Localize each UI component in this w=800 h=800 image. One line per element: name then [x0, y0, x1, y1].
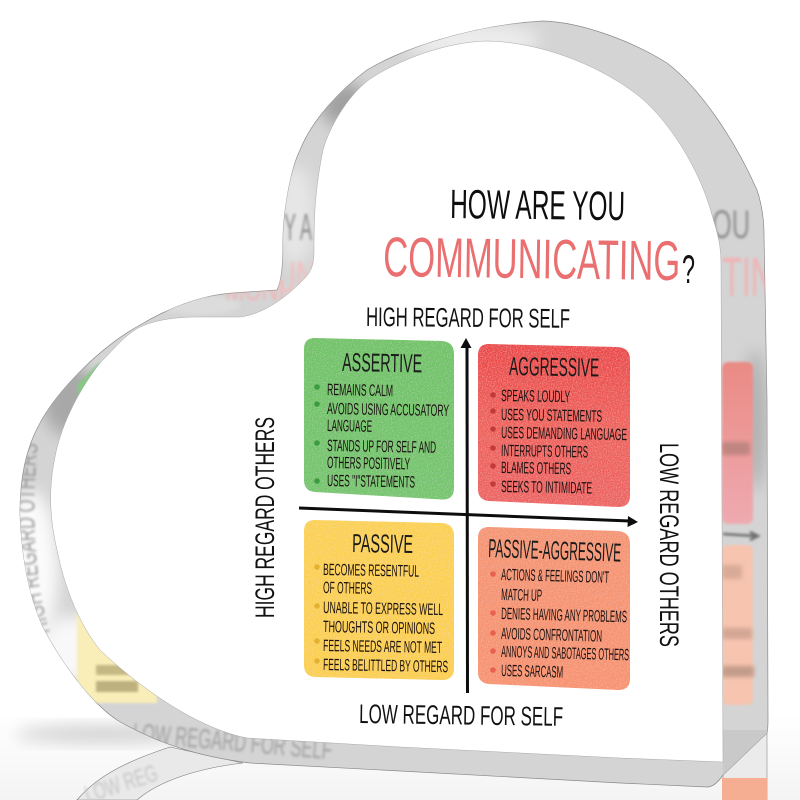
passive-aggressive list: AVOIDS CONFRONTATION [501, 625, 602, 646]
assertive list: REMAINS CALM [327, 381, 393, 400]
mirrored heart reflection on floor [77, 747, 243, 800]
passive list: FEELS BELITTLED BY OTHERS [323, 656, 448, 676]
title [383, 181, 695, 292]
aggressive list: SEEKS TO INTIMIDATE [501, 478, 592, 498]
passive bullets [314, 564, 320, 664]
passive list: UNABLE TO EXPRESS WELL [323, 599, 443, 619]
aggressive list: USES YOU STATEMENTS [501, 406, 602, 426]
aggressive card background [478, 344, 630, 507]
vertical axis arrow [460, 338, 472, 693]
acrylic heart edge: MUNI [225, 274, 285, 307]
passive list [323, 561, 448, 676]
acrylic heart edge: LOW REGARD FOR SELF [131, 717, 333, 765]
panel: aggressive [478, 344, 630, 507]
passive heading: PASSIVE [352, 528, 413, 559]
passive list: OF OTHERS [323, 579, 372, 598]
passive list: BECOMES RESENTFUL [323, 561, 419, 581]
aggressive bullets [490, 392, 496, 487]
horizontal axis arrow [299, 508, 638, 527]
axis label: low regard for self: LOW REGARD FOR SELF [359, 699, 563, 732]
passive-aggressive list: MATCH UP [501, 586, 542, 605]
aggressive list: INTERRUPTS OTHERS [501, 442, 588, 462]
panel: passive-aggressive [478, 527, 630, 690]
acrylic heart edge: OU [712, 203, 750, 247]
title: HOW ARE YOU [450, 181, 625, 229]
aggressive list: USES DEMANDING LANGUAGE [501, 424, 627, 444]
heart front face [51, 41, 723, 762]
acrylic heart edge: HIGH REGARD OTHERS [20, 442, 50, 634]
text: ANNOYS AND SABOTAGES OTHERS [501, 643, 629, 664]
aggressive heading: AGGRESSIVE [509, 351, 599, 383]
assertive list: STANDS UP FOR SELF AND [327, 437, 436, 457]
axis label: high regard for self: HIGH REGARD FOR SELF [366, 302, 570, 334]
text: DENIES HAVING ANY PROBLEMS [501, 605, 627, 626]
passive-aggressive list: USES SARCASM [501, 662, 563, 682]
assertive list: AVOIDS USING ACCUSATORY [327, 400, 449, 420]
lower right base reflection [722, 733, 767, 800]
panel: passive [304, 520, 454, 680]
aggressive list: BLAMES OTHERS [501, 459, 571, 478]
background floor [0, 715, 800, 800]
passive list: THOUGHTS OR OPINIONS [323, 618, 435, 638]
assertive heading: ASSERTIVE [342, 347, 422, 378]
passive card background [304, 520, 454, 680]
passive list: FEELS NEEDS ARE NOT MET [323, 637, 442, 657]
axis label: high regard others: HIGH REGARD OTHERS [250, 417, 280, 618]
assertive list [327, 381, 449, 492]
acrylic heart edge: Y A [284, 207, 312, 249]
passive-aggressive list [501, 566, 629, 682]
aggressive list [501, 387, 627, 498]
passive-aggressive list: ACTIONS & FEELINGS DON'T [501, 566, 609, 587]
assertive list: USES "I"STATEMENTS [327, 472, 415, 492]
passive-aggressive bullets [490, 571, 496, 673]
panel: assertive [304, 338, 454, 500]
acrylic heart edge: UN [276, 253, 316, 302]
assertive bullets [314, 384, 320, 484]
assertive card background [304, 338, 454, 500]
aggressive list: SPEAKS LOUDLY [501, 387, 570, 406]
title: ? [682, 248, 695, 292]
floor shadow [15, 725, 195, 743]
text: PASSIVE-AGGRESSIVE [488, 533, 622, 568]
assertive list: OTHERS POSITIVELY [327, 454, 410, 473]
axis label: low regard others: LOW REGARD OTHERS [654, 443, 684, 647]
assertive list: LANGUAGE [327, 417, 372, 436]
passive-aggressive card background [478, 527, 630, 690]
